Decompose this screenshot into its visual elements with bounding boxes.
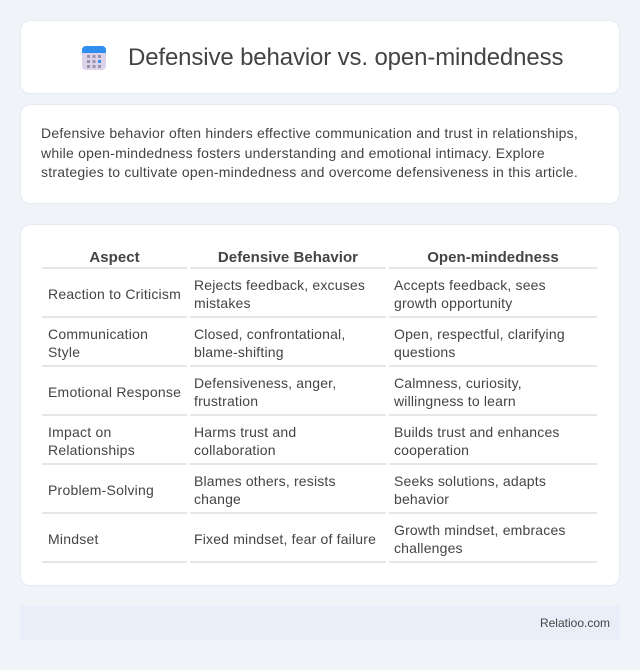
- panel: comparison table: [20, 224, 620, 586]
- row: impact on relationships: [42, 416, 187, 465]
- header: aspect: [42, 248, 187, 269]
- header: open-mindedness: [389, 248, 597, 269]
- row: problem-solving: Problem-Solving: [48, 482, 154, 498]
- text: introduction: strategies to cultivate open-mindedness and overcome defensiveness in this article.: [41, 164, 578, 180]
- header: defensive behavior: [190, 248, 386, 269]
- panel: introduction: [20, 104, 620, 204]
- row: communication style: Style: [48, 344, 80, 360]
- table: comparison: challenges: [394, 540, 463, 556]
- text: introduction: while open-mindedness fosters understanding and emotional intimacy. Explore: [41, 144, 545, 160]
- table: comparison: willingness to learn: [394, 392, 516, 408]
- table: comparison: questions: [394, 344, 456, 360]
- table: comparison: Seeks solutions, adapts: [394, 472, 546, 488]
- text: introduction: [41, 125, 578, 180]
- row: problem-solving: [42, 465, 187, 514]
- table: comparison: collaboration: [194, 442, 276, 458]
- row: reaction to criticism: [42, 269, 187, 318]
- table: comparison: Open, respectful, clarifying: [394, 326, 565, 342]
- table: comparison: Builds trust and enhances: [394, 424, 560, 440]
- text: introduction: Defensive behavior often hinders effective communication and trust in relationships,: [41, 125, 578, 141]
- table: comparison: behavior: [394, 490, 449, 506]
- table: comparison: Blames others, resists: [194, 472, 336, 488]
- table: comparison: Closed, confrontational,: [194, 326, 345, 342]
- table: comparison: Fixed mindset, fear of failure: [194, 530, 376, 546]
- table: comparison: Growth mindset, embraces: [394, 522, 566, 538]
- row: mindset: [42, 514, 187, 563]
- table: comparison: growth opportunity: [394, 294, 512, 310]
- header: aspect: Aspect: [89, 249, 140, 266]
- panel: title header: [20, 20, 620, 94]
- icon: calendar: [82, 46, 106, 70]
- row: communication style: [42, 318, 187, 367]
- header: open-mindedness: Open-mindedness: [427, 249, 559, 266]
- row: impact on relationships: Relationships: [48, 442, 135, 458]
- header: defensive behavior: Defensive Behavior: [218, 249, 358, 266]
- table: comparison: Accepts feedback, sees: [394, 276, 546, 292]
- row: mindset: Mindset: [48, 530, 99, 546]
- row: emotional response: Emotional Response: [48, 384, 181, 400]
- table: comparison: Harms trust and: [194, 424, 296, 440]
- row: impact on relationships: Impact on: [48, 424, 111, 440]
- row: communication style: Communication: [48, 326, 148, 342]
- footer: source: Relatioo.com: [540, 616, 610, 630]
- table: comparison: Defensiveness, anger,: [194, 374, 336, 390]
- title: Defensive behavior vs. open-mindedness: [128, 44, 563, 71]
- table: comparison: Calmness, curiosity,: [394, 374, 522, 390]
- row: reaction to criticism: Reaction to Criticism: [48, 286, 181, 302]
- footer bar: [20, 606, 620, 640]
- table: comparison: blame-shifting: [194, 344, 284, 360]
- table: comparison: change: [194, 490, 241, 506]
- table: comparison: cooperation: [394, 442, 469, 458]
- row: emotional response: [42, 367, 187, 416]
- table: comparison: Rejects feedback, excuses: [194, 276, 365, 292]
- table: comparison: mistakes: [194, 294, 251, 310]
- table: comparison: frustration: [194, 392, 258, 408]
